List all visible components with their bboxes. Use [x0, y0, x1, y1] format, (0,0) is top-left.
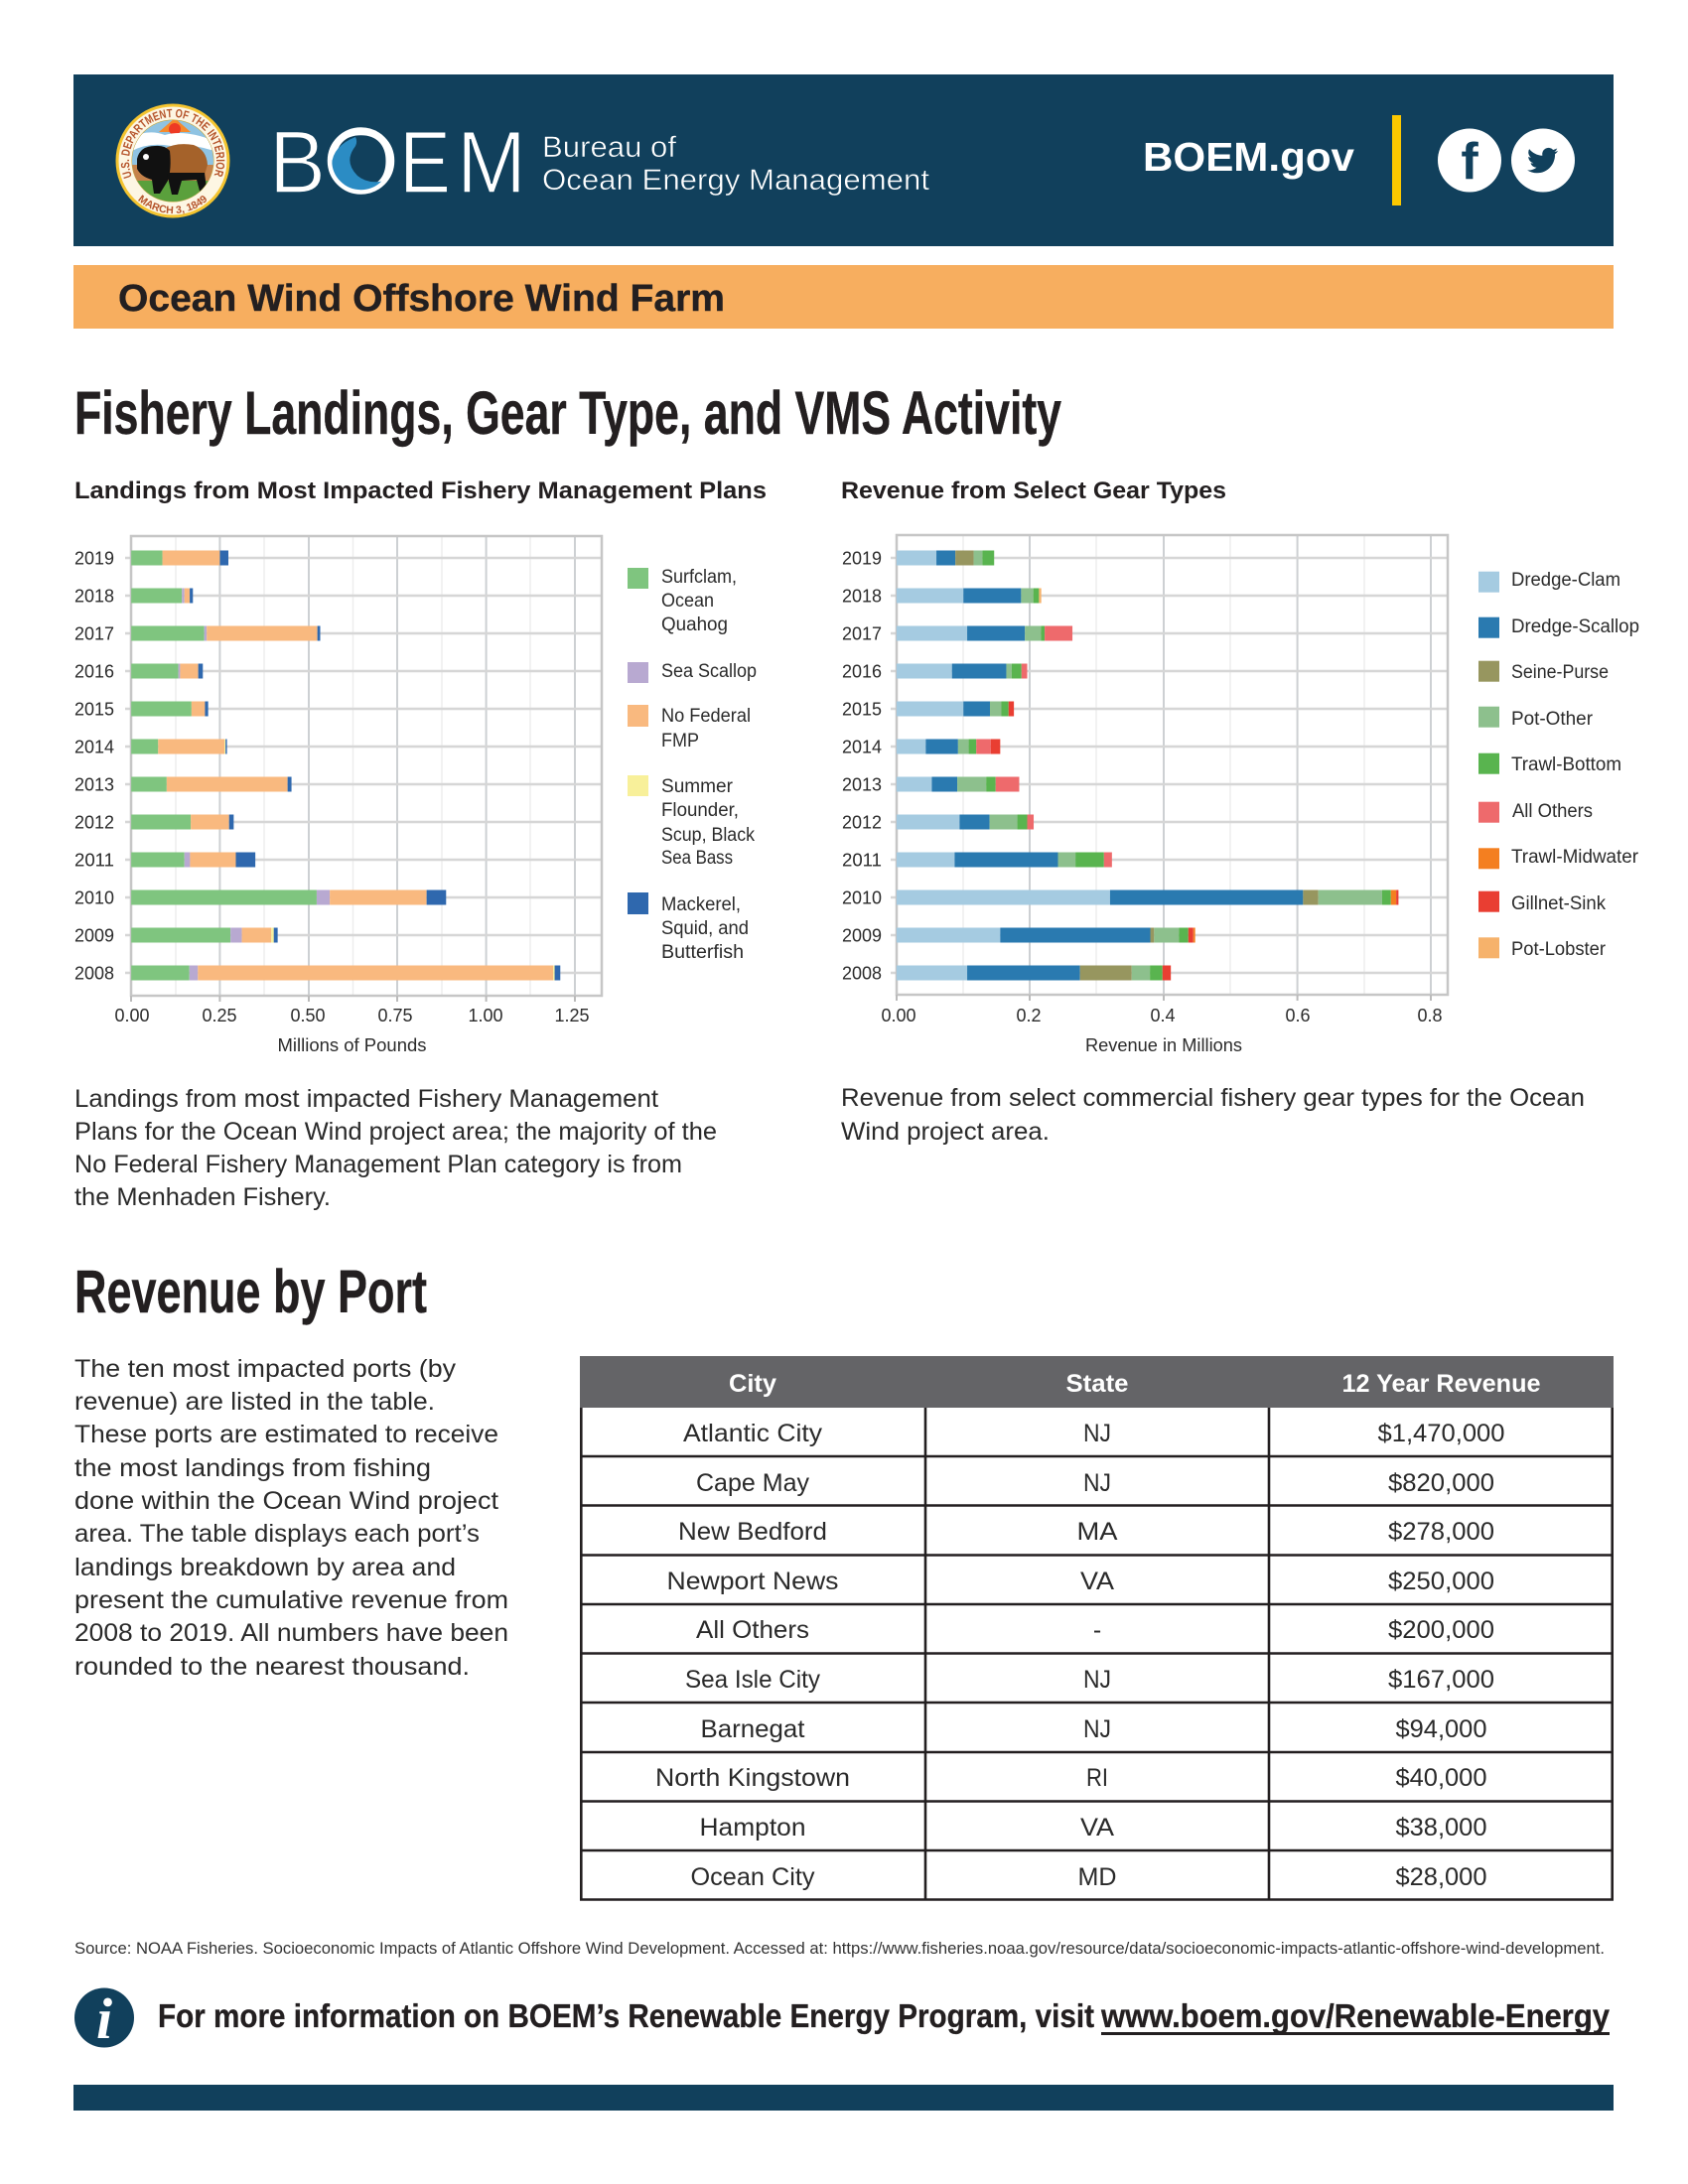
table row: Ocean City: $28,000 — [1396, 1863, 1487, 1891]
year labels: 2014 — [74, 737, 114, 756]
call to action: For more information on BOEM’s Renewable Energy Program, visit — [158, 1997, 1094, 2034]
table row: Ocean City — [691, 1863, 1487, 1891]
table row: Atlantic City — [683, 1420, 1505, 1447]
x axis tick labels: 0.75 — [377, 1006, 413, 1025]
legend item: pot-other — [1478, 707, 1594, 730]
year labels: 2015 — [74, 699, 114, 719]
bar chart: landings — [74, 536, 602, 1055]
text block: port description: area. The table displays each port’s — [74, 1520, 480, 1548]
legend item: summer flounder: Sea Bass — [661, 848, 733, 869]
table row: North Kingstown: RI — [1086, 1764, 1108, 1792]
legend item: mackerel: Squid, and — [661, 918, 749, 939]
year labels: 2013 — [74, 774, 114, 794]
bar chart: revenue — [842, 535, 1448, 1055]
table row: Ocean City: MD — [1078, 1863, 1116, 1891]
logo: BOEM wordmark — [269, 111, 526, 211]
bar 2019 — [897, 550, 994, 566]
x axis tick labels: 1.00 — [468, 1006, 503, 1025]
header banner — [73, 74, 1614, 246]
table row: Barnegat: $94,000 — [1396, 1715, 1487, 1743]
logo: agency name — [542, 131, 930, 197]
table row: Cape May: Cape May — [696, 1469, 809, 1497]
legend item: surfclam: Ocean — [661, 591, 714, 612]
logo: agency name: Bureau of — [542, 131, 677, 164]
table header: State — [1066, 1370, 1129, 1398]
seal lettering: MARCH 3, 1849 — [138, 195, 207, 214]
legend item: gillnet-sink — [1478, 891, 1606, 914]
source note: Source: NOAA Fisheries. Socioeconomic Impacts of Atlantic Offshore Wind Development. Accessed at: https://www.fisheries.noaa.gov/resource/data/socioeconomic-impacts-atlantic-offshore-wind-development. — [74, 1939, 1605, 1958]
legend item: mackerel: Butterfish — [661, 942, 744, 963]
year labels: 2009 — [842, 925, 882, 945]
text block: port description: revenue) are listed in the table. — [74, 1388, 435, 1416]
x axis title: Millions of Pounds — [278, 1035, 427, 1055]
table header — [580, 1356, 1614, 1408]
bar 2012 — [131, 814, 233, 830]
legend item: surfclam: Surfclam, — [661, 567, 737, 588]
legend item: summer flounder: Flounder, — [661, 800, 739, 821]
table row: North Kingstown — [655, 1764, 1487, 1792]
logo: BOEM wordmark: B — [269, 112, 326, 211]
year labels: 2018 — [74, 586, 114, 606]
legend item: sea scallop: Sea Scallop — [661, 661, 757, 682]
bar 2010 — [897, 889, 1398, 905]
logo: agency name: Ocean Energy Management — [542, 164, 930, 197]
text block: port description: done within the Ocean Wind project — [74, 1487, 498, 1515]
year labels: 2013 — [842, 774, 882, 794]
subheading: landings chart: Landings from Most Impacted Fishery Management Plans — [74, 478, 767, 504]
icon: facebook: f — [1461, 133, 1478, 191]
caption: landings — [74, 1085, 717, 1211]
caption: landings: No Federal Fishery Management Plan category is from — [74, 1151, 682, 1178]
table row: Atlantic City: $1,470,000 — [1378, 1420, 1505, 1447]
legend item: summer flounder: Scup, Black — [661, 825, 755, 846]
year labels: 2017 — [74, 623, 114, 643]
legend item: pot-lobster — [1478, 937, 1607, 960]
year labels: 2010 — [842, 887, 882, 907]
table row: Ocean City: Ocean City — [691, 1863, 815, 1891]
x axis tick labels: 0.2 — [1016, 1006, 1042, 1025]
legend item: all others: All Others — [1512, 801, 1593, 822]
caption: landings: Landings from most impacted Fishery Management — [74, 1085, 658, 1113]
year labels: 2012 — [74, 812, 114, 832]
table row: Sea Isle City — [685, 1666, 1494, 1694]
text block: port description: The ten most impacted ports (by — [74, 1355, 457, 1383]
bar 2011 — [131, 852, 255, 868]
legend item: surfclam — [628, 567, 737, 635]
logo: BOEM wordmark: O — [324, 111, 398, 210]
year labels: 2019 — [842, 548, 882, 568]
text block: port description: 2008 to 2019. All numbers have been — [74, 1619, 508, 1647]
bar 2019 — [131, 550, 228, 566]
year labels: 2016 — [74, 661, 114, 681]
year labels: 2015 — [842, 699, 882, 719]
legend item: sea scallop — [628, 661, 757, 683]
table row: Cape May: NJ — [1083, 1469, 1111, 1497]
icon: facebook — [1438, 129, 1501, 193]
orange title band — [73, 265, 1614, 329]
year labels: 2018 — [842, 586, 882, 606]
legend item: all others — [1478, 801, 1593, 823]
bar 2016 — [131, 663, 203, 679]
x axis title: Revenue in Millions — [1085, 1035, 1242, 1055]
table row: Atlantic City: NJ — [1083, 1420, 1111, 1447]
text block: port description — [74, 1355, 508, 1681]
bar 2018 — [897, 588, 1042, 604]
table row: All Others: $200,000 — [1388, 1616, 1494, 1644]
text block: port description: present the cumulative revenue from — [74, 1586, 508, 1614]
caption: landings: Plans for the Ocean Wind project area; the majority of the — [74, 1118, 717, 1146]
logo: BOEM wordmark: E — [399, 112, 451, 211]
seal lettering: U.S. DEPARTMENT OF THE INTERIOR — [121, 109, 224, 179]
legend item: dredge-clam — [1478, 570, 1620, 593]
text block: port description: landings breakdown by area and — [74, 1554, 456, 1581]
table row: Hampton — [699, 1814, 1487, 1842]
legend item: pot-other: Pot-Other — [1511, 709, 1594, 730]
revenue bars — [897, 550, 1398, 981]
icon: information: i — [96, 1986, 112, 2051]
yellow separator — [1392, 115, 1401, 205]
bar 2013 — [131, 776, 292, 792]
heading: revenue by port: Revenue by Port — [74, 1258, 427, 1325]
legend item: dredge-scallop: Dredge-Scallop — [1511, 616, 1639, 637]
legend item: no federal FMP: No Federal — [661, 706, 751, 727]
table row: All Others: - — [1093, 1616, 1101, 1644]
table row: Barnegat: Barnegat — [701, 1715, 805, 1743]
bar 2015 — [131, 701, 209, 717]
legend item: pot-lobster: Pot-Lobster — [1511, 939, 1607, 960]
year labels: 2017 — [842, 623, 882, 643]
table row: Sea Isle City: $167,000 — [1388, 1666, 1494, 1694]
table row: New Bedford: New Bedford — [678, 1518, 827, 1546]
bar 2017 — [131, 625, 320, 641]
legend item: summer flounder: Summer — [661, 776, 734, 797]
table row: New Bedford — [678, 1518, 1494, 1546]
x axis tick labels — [881, 1006, 1443, 1025]
table row: Cape May — [696, 1469, 1494, 1497]
table row: Sea Isle City: Sea Isle City — [685, 1666, 820, 1694]
legend item: trawl-bottom: Trawl-Bottom — [1511, 754, 1621, 775]
table row: Sea Isle City: NJ — [1083, 1666, 1111, 1694]
bar 2011 — [897, 852, 1112, 868]
icon: twitter — [1511, 129, 1575, 193]
x axis tick labels: 0.00 — [114, 1006, 150, 1025]
table row: Newport News: VA — [1080, 1568, 1114, 1595]
logo: BOEM wordmark: M — [457, 112, 526, 211]
table row: Hampton: Hampton — [699, 1814, 806, 1842]
bar 2018 — [131, 588, 193, 604]
table row: Newport News — [667, 1568, 1494, 1595]
legend: revenue — [1478, 570, 1639, 960]
text block: port description: rounded to the nearest thousand. — [74, 1653, 470, 1681]
table row: New Bedford: $278,000 — [1388, 1518, 1494, 1546]
bar 2016 — [897, 663, 1028, 679]
bar 2008 — [897, 965, 1171, 981]
year labels: 2012 — [842, 812, 882, 832]
year labels: 2009 — [74, 925, 114, 945]
footer bar — [73, 2085, 1614, 2111]
bar 2015 — [897, 701, 1014, 717]
heading: fishery landings: Fishery Landings, Gear Type, and VMS Activity — [74, 379, 1061, 447]
legend item: seine-purse: Seine-Purse — [1511, 662, 1609, 683]
text block: port description: These ports are estimated to receive — [74, 1421, 498, 1448]
x axis tick labels: 0.6 — [1285, 1006, 1311, 1025]
call to action: www.boem.gov/Renewable-Energy — [1100, 1997, 1611, 2034]
table row: Barnegat — [701, 1715, 1487, 1743]
landings bars — [131, 550, 560, 981]
caption: revenue — [841, 1084, 1585, 1146]
bar 2013 — [897, 776, 1019, 792]
year labels: 2010 — [74, 887, 114, 907]
subheading: revenue chart: Revenue from Select Gear Types — [841, 478, 1226, 504]
bar 2014 — [897, 739, 1000, 754]
x axis tick labels: 1.25 — [554, 1006, 590, 1025]
bar 2009 — [131, 927, 278, 943]
year labels: 2008 — [842, 963, 882, 983]
table: revenue by port — [580, 1356, 1614, 1900]
bar 2010 — [131, 889, 446, 905]
legend item: dredge-clam: Dredge-Clam — [1511, 570, 1620, 591]
x axis tick labels: 0.8 — [1417, 1006, 1443, 1025]
year labels: 2019 — [74, 548, 114, 568]
year labels: 2014 — [842, 737, 882, 756]
icon: Department of the Interior seal — [115, 103, 230, 218]
seal lettering — [121, 109, 224, 214]
legend item: no federal FMP: FMP — [661, 731, 699, 751]
legend item: gillnet-sink: Gillnet-Sink — [1511, 893, 1606, 914]
year labels: 2011 — [842, 850, 882, 870]
caption: landings: the Menhaden Fishery. — [74, 1183, 331, 1211]
table row: Newport News: $250,000 — [1388, 1568, 1494, 1595]
bar 2017 — [897, 625, 1072, 641]
year labels: 2016 — [842, 661, 882, 681]
icon: information — [74, 1986, 134, 2051]
call to action — [158, 1997, 1611, 2035]
x axis tick labels: 0.25 — [202, 1006, 237, 1025]
year labels: 2011 — [74, 850, 114, 870]
table row: Newport News: Newport News — [667, 1568, 838, 1595]
caption: revenue: Revenue from select commercial fishery gear types for the Ocean — [841, 1084, 1585, 1112]
legend item: trawl-midwater: Trawl-Midwater — [1511, 847, 1639, 868]
table row: New Bedford: MA — [1076, 1518, 1118, 1546]
year labels — [74, 548, 114, 983]
bar 2012 — [897, 814, 1034, 830]
legend item: no federal FMP — [628, 705, 751, 751]
legend item: mackerel: Mackerel, — [661, 894, 741, 915]
table row: Hampton: VA — [1080, 1814, 1114, 1842]
website label: BOEM.gov — [1143, 134, 1354, 180]
x axis tick labels: 0.00 — [881, 1006, 916, 1025]
table row: North Kingstown: $40,000 — [1396, 1764, 1487, 1792]
table row: Atlantic City: Atlantic City — [683, 1420, 823, 1447]
legend item: seine-purse — [1478, 661, 1609, 683]
table row: Cape May: $820,000 — [1388, 1469, 1494, 1497]
legend: landings — [628, 567, 757, 963]
table row: All Others — [696, 1616, 1494, 1644]
legend item: mackerel — [628, 892, 749, 963]
table row: North Kingstown: North Kingstown — [655, 1764, 850, 1792]
year labels: 2008 — [74, 963, 114, 983]
x axis tick labels: 0.4 — [1150, 1006, 1176, 1025]
bar 2008 — [131, 965, 560, 981]
caption: revenue: Wind project area. — [841, 1118, 1050, 1146]
band title: Ocean Wind Offshore Wind Farm — [118, 278, 725, 320]
bar 2014 — [131, 739, 227, 754]
year labels — [842, 548, 882, 983]
table row: Hampton: $38,000 — [1396, 1814, 1487, 1842]
x axis tick labels: 0.50 — [290, 1006, 326, 1025]
table header: 12 Year Revenue — [1342, 1370, 1541, 1398]
table header: City — [729, 1370, 776, 1398]
bar 2009 — [897, 927, 1196, 943]
table row: All Others: All Others — [696, 1616, 809, 1644]
x axis tick labels — [114, 1006, 590, 1025]
legend item: surfclam: Quahog — [661, 614, 728, 635]
legend item: summer flounder — [628, 775, 755, 869]
table row: Barnegat: NJ — [1083, 1715, 1111, 1743]
text block: port description: the most landings from fishing — [74, 1454, 431, 1482]
